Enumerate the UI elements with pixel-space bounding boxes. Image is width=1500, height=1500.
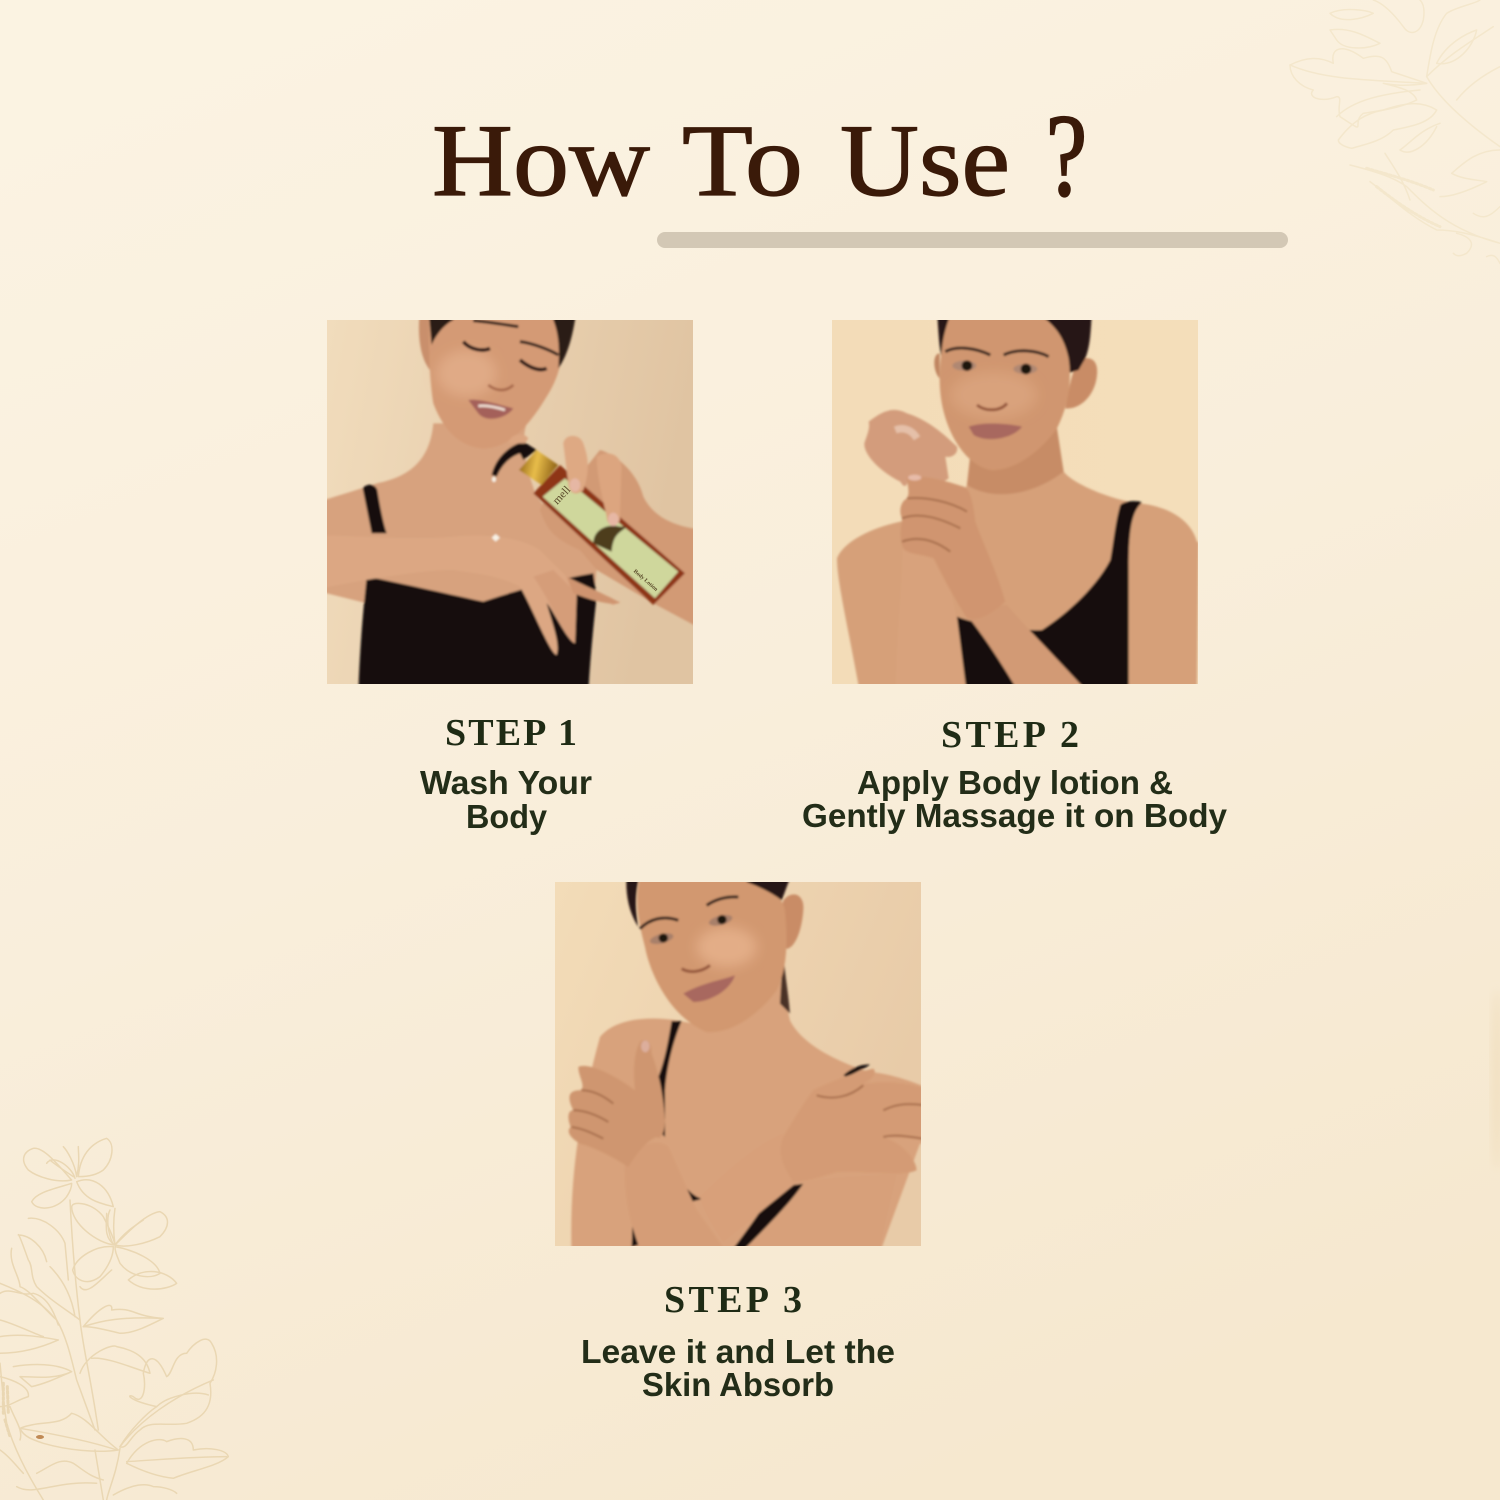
step 3 description: Leave it and Let the xyxy=(581,1333,895,1370)
step 3 description: Skin Absorb xyxy=(642,1366,834,1403)
step 2 description xyxy=(802,764,1228,834)
photo: woman with arms crossed letting the skin absorb lotion xyxy=(555,882,921,1246)
photo: woman dispensing body lotion on her arm xyxy=(327,320,693,684)
step 2 heading: STEP 2 xyxy=(941,714,1079,756)
title underline bar xyxy=(657,232,1288,248)
speck: orange mark on bottom left leaf xyxy=(36,1435,44,1439)
title xyxy=(432,90,1087,221)
photo: woman massaging lotion on her wrist xyxy=(832,320,1198,684)
step 1 description: Body xyxy=(466,798,548,835)
panel: step 3 xyxy=(555,874,933,1403)
step 1 description xyxy=(420,764,592,835)
step 3 heading: STEP 3 xyxy=(664,1279,802,1321)
step 1 description: Wash Your xyxy=(420,764,592,801)
panel: step 2 xyxy=(802,312,1228,834)
photo: woman dispensing body lotion on her arm: mell xyxy=(551,484,573,507)
speck: right edge shading xyxy=(1492,990,1500,1170)
title: Use xyxy=(840,104,1010,218)
title: ? xyxy=(1046,90,1087,221)
step 3 description xyxy=(581,1333,895,1403)
step 1 heading: STEP 1 xyxy=(445,712,577,754)
title: To xyxy=(682,104,803,218)
title: How xyxy=(432,104,650,218)
photo: woman dispensing body lotion on her arm: Body Lotion xyxy=(632,569,659,593)
step 2 description: Gently Massage it on Body xyxy=(802,797,1228,834)
decoration: botanical line art top right xyxy=(1290,0,1500,263)
decoration: botanical line art bottom left xyxy=(0,1138,228,1500)
panel: step 1 xyxy=(313,310,703,835)
step 2 description: Apply Body lotion & xyxy=(857,764,1173,801)
